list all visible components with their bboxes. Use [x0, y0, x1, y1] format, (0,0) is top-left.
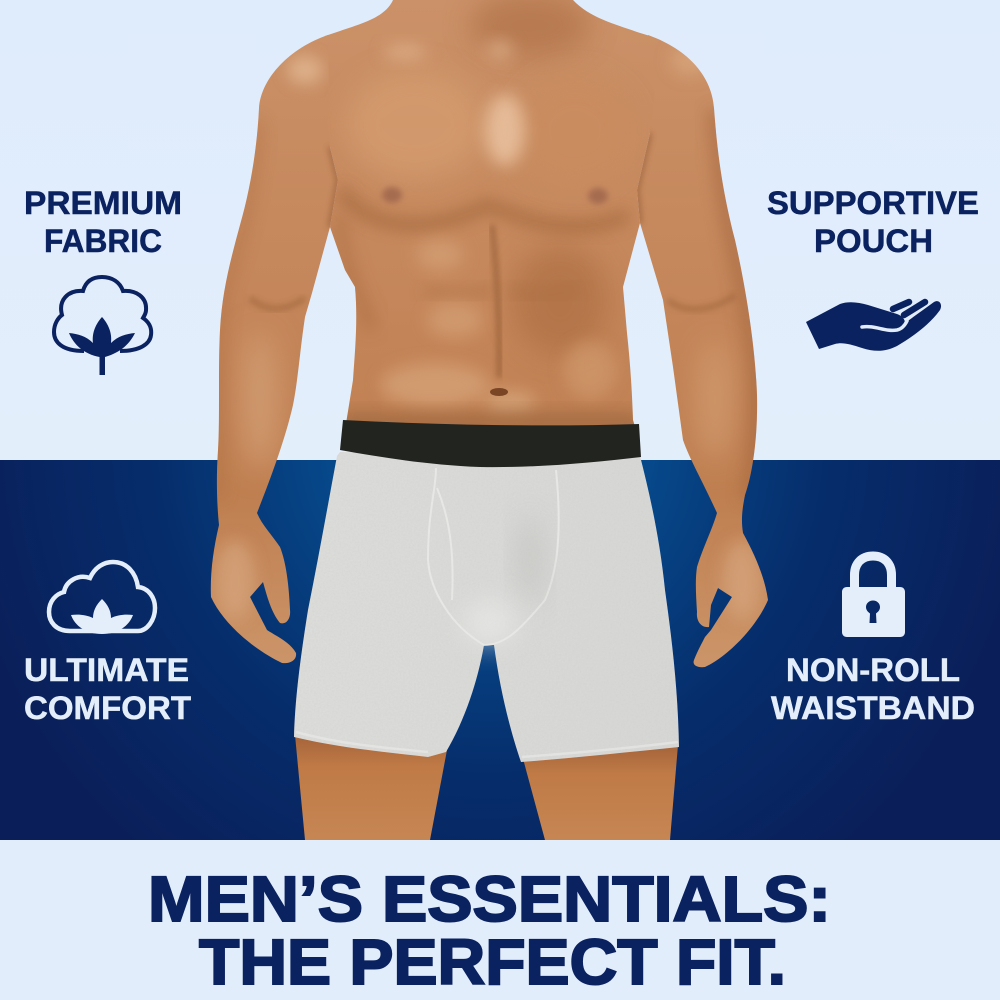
top background	[0, 0, 1000, 460]
heading: ultimate comfort: ULTIMATE	[24, 652, 189, 688]
left nipple	[382, 187, 402, 203]
muscle shading	[340, 0, 640, 434]
heading: premium fabric: FABRIC	[44, 223, 162, 259]
heading: supportive pouch: SUPPORTIVE	[767, 185, 979, 221]
boxer briefs	[294, 452, 679, 762]
arm shading	[215, 44, 762, 620]
waistband	[340, 420, 641, 467]
torso	[320, 0, 660, 430]
heading: non-roll waistband: WAISTBAND	[771, 690, 975, 726]
pouch highlight	[464, 600, 516, 644]
blue band	[0, 460, 1000, 840]
icon: cotton boll	[54, 277, 151, 375]
right arm	[637, 35, 768, 667]
heading: supportive pouch	[767, 185, 979, 259]
left arm	[211, 35, 338, 663]
icon: padlock	[842, 556, 905, 637]
heading: non-roll waistband: NON-ROLL	[786, 652, 960, 688]
left thigh	[295, 735, 447, 840]
title	[148, 863, 831, 998]
heading: premium fabric	[24, 185, 182, 259]
right thigh	[522, 745, 678, 840]
heading: ultimate comfort	[24, 652, 191, 726]
right nipple	[588, 188, 608, 204]
heading: supportive pouch: POUCH	[814, 223, 933, 259]
heather fabric texture	[294, 452, 679, 762]
heading: non-roll waistband	[771, 652, 975, 726]
heading: premium fabric: PREMIUM	[24, 185, 182, 221]
title: THE PERFECT FIT.	[199, 926, 786, 998]
icon: cotton cloud	[49, 562, 155, 634]
icon: open hand	[806, 301, 941, 351]
boxer pouch seams	[296, 468, 678, 757]
bottom title strip	[0, 840, 1000, 1000]
title: MEN’S ESSENTIALS:	[148, 863, 831, 935]
heading: ultimate comfort: COMFORT	[24, 690, 191, 726]
navel	[490, 388, 508, 396]
pouch shading	[518, 515, 542, 605]
model photo: torso, arms and boxer briefs	[211, 0, 768, 840]
